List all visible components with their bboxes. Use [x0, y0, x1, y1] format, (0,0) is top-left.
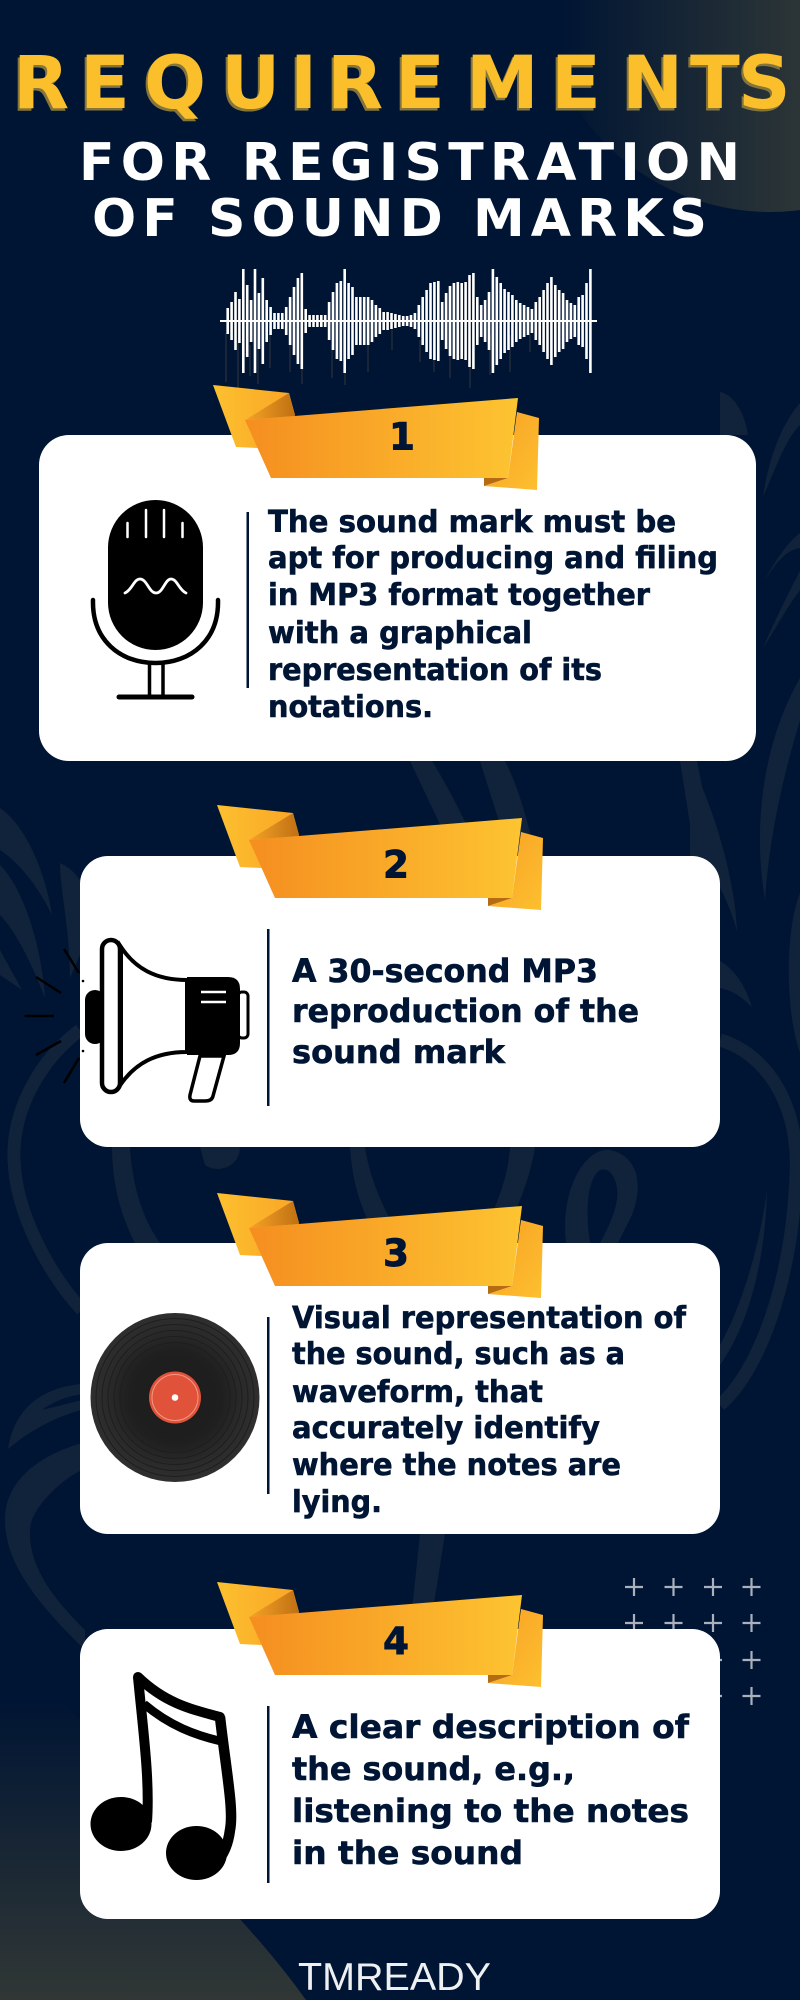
- text block 1: notations.: [268, 690, 433, 725]
- divider: [267, 1706, 270, 1883]
- footer brand: TMREADY: [298, 1956, 491, 1999]
- divider: [246, 512, 249, 688]
- title: REQUIREMENTS: REQUIREMENTS: [11, 44, 789, 128]
- ribbon 1: [213, 385, 539, 490]
- text block 4: in the sound: [292, 1834, 523, 1872]
- ribbon 4: 4: [383, 1620, 409, 1663]
- text block 1: The sound mark must be: [268, 505, 676, 540]
- text block 4: A clear description of: [292, 1708, 690, 1746]
- icon: music notes: [90, 1677, 231, 1880]
- ribbon 1: 1: [389, 416, 415, 458]
- icon: megaphone: [82, 940, 248, 1101]
- text block 4: [292, 1708, 690, 1872]
- panel: requirement 2: [80, 856, 720, 1147]
- text block 3: accurately identify: [292, 1411, 600, 1446]
- panel: requirement 1: [39, 435, 756, 761]
- text block 3: lying.: [292, 1485, 382, 1520]
- ribbon 3: [217, 1193, 543, 1298]
- decorative plus grid: [625, 1578, 760, 1705]
- top-right glow shape: [538, 0, 800, 212]
- icon: vinyl record: [90, 1313, 260, 1482]
- icon: microphone: [93, 500, 218, 697]
- text block 2: sound mark: [292, 1033, 506, 1071]
- divider: [267, 1317, 270, 1494]
- subtitle line 1: FOR REGISTRATION: [79, 133, 740, 193]
- background ornament swirls: [0, 392, 800, 1650]
- text block 2: [292, 952, 639, 1071]
- text block 3: where the notes are: [292, 1448, 621, 1483]
- text block 3: Visual representation of: [292, 1301, 687, 1336]
- panel: requirement 3: [80, 1243, 720, 1534]
- background ornament large arcs: [14, 1030, 796, 1405]
- text block 1: [268, 505, 718, 725]
- text block 3: [292, 1301, 687, 1520]
- panel: requirement 4: [80, 1629, 720, 1919]
- subtitle line 2: OF SOUND MARKS: [92, 189, 707, 249]
- waveform: [220, 269, 597, 388]
- ribbon 2: 2: [383, 844, 409, 886]
- text block 3: waveform, that: [292, 1375, 543, 1410]
- text block 4: listening to the notes: [292, 1792, 689, 1830]
- ribbon 4: [217, 1582, 543, 1687]
- divider: [267, 929, 270, 1106]
- text block 1: with a graphical: [268, 616, 532, 651]
- text block 1: in MP3 format together: [268, 578, 650, 613]
- text block 4: the sound, e.g.,: [292, 1750, 575, 1788]
- text block 2: A 30-second MP3: [292, 952, 598, 990]
- ribbon 2: [217, 805, 543, 910]
- text block 3: the sound, such as a: [292, 1337, 625, 1372]
- text block 1: representation of its: [268, 653, 602, 688]
- icon: sound lines of megaphone: [24, 949, 79, 1083]
- text block 1: apt for producing and filing: [268, 541, 718, 576]
- text block 2: reproduction of the: [292, 992, 639, 1030]
- bottom-left glow shape: [0, 1650, 306, 2000]
- ribbon 3: 3: [383, 1232, 409, 1275]
- title: REQUIREMENTS: REQUIREMENTS: [13, 41, 791, 126]
